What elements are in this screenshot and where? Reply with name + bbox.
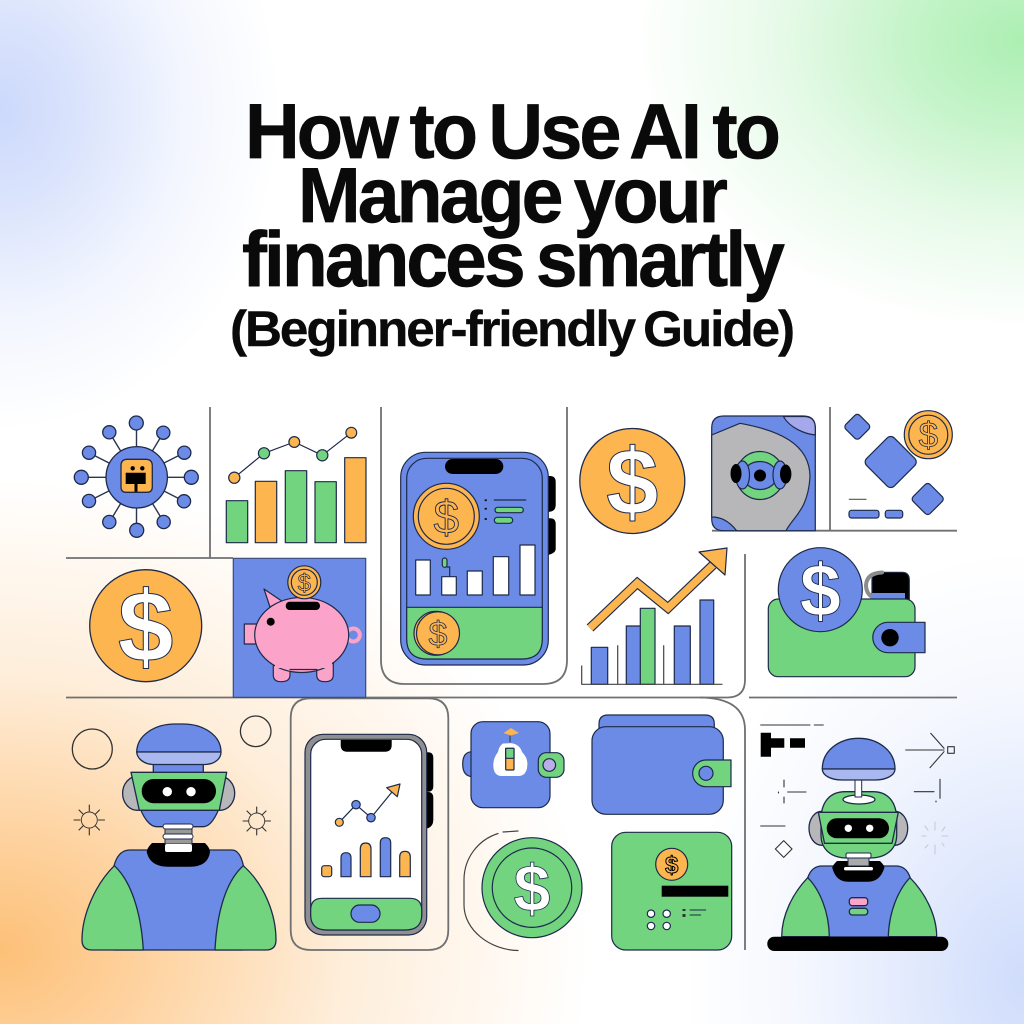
illustration: green robot at desk xyxy=(761,725,954,951)
icon: green dollar coin with dashed arc: $ xyxy=(514,851,550,925)
arrow: rising trend xyxy=(590,548,727,628)
icon: large orange dollar coin left: $ xyxy=(118,571,174,683)
icon: green wallet with blue coin: $ xyxy=(800,549,841,632)
title: Manage your xyxy=(298,151,728,239)
icon: blue phone with coins and bars xyxy=(401,452,556,665)
icon: blue phone with coins and bars: $ xyxy=(429,616,448,654)
title: (Beginner-friendly Guide) xyxy=(230,301,793,357)
icon: green dollar coin with dashed arc xyxy=(464,831,582,950)
icon: coin above piggy bank: $ xyxy=(298,570,311,597)
icon: AI network hub xyxy=(74,416,198,537)
icon: large orange dollar coin left xyxy=(90,570,202,683)
icon: piggy bank panel xyxy=(233,558,366,697)
icon: sparkle right xyxy=(243,807,270,835)
icon: diamonds, coin and pills: $ xyxy=(919,416,938,455)
title: finances smartly xyxy=(242,215,785,303)
icon: phone with charts xyxy=(305,734,433,935)
icon: big blue wallet xyxy=(592,715,731,814)
icon: diamonds, coin and pills xyxy=(843,411,952,518)
chart: growth bars with rising arrow xyxy=(582,548,727,684)
icon: orange dollar coin top: $ xyxy=(606,429,658,534)
robot neck spring xyxy=(163,824,193,852)
icon: orange dollar coin top xyxy=(580,428,685,534)
icon: green wallet with blue coin xyxy=(768,548,925,677)
icon: sparkle left xyxy=(74,805,104,835)
icon: green card with coin: $ xyxy=(665,852,679,879)
icon: blue phone with coins and bars: $ xyxy=(434,491,459,543)
chart: bars with trend line xyxy=(226,427,366,543)
icon: small blue wallet with lock xyxy=(463,722,564,808)
illustration: blue robot with green arms xyxy=(72,716,276,950)
icon: green card with coin xyxy=(612,832,732,950)
title xyxy=(230,87,793,357)
decoration: tech marks xyxy=(761,725,954,857)
title: How to Use AI to xyxy=(245,87,778,175)
icon: blue and grey vault card with eye xyxy=(712,416,815,531)
